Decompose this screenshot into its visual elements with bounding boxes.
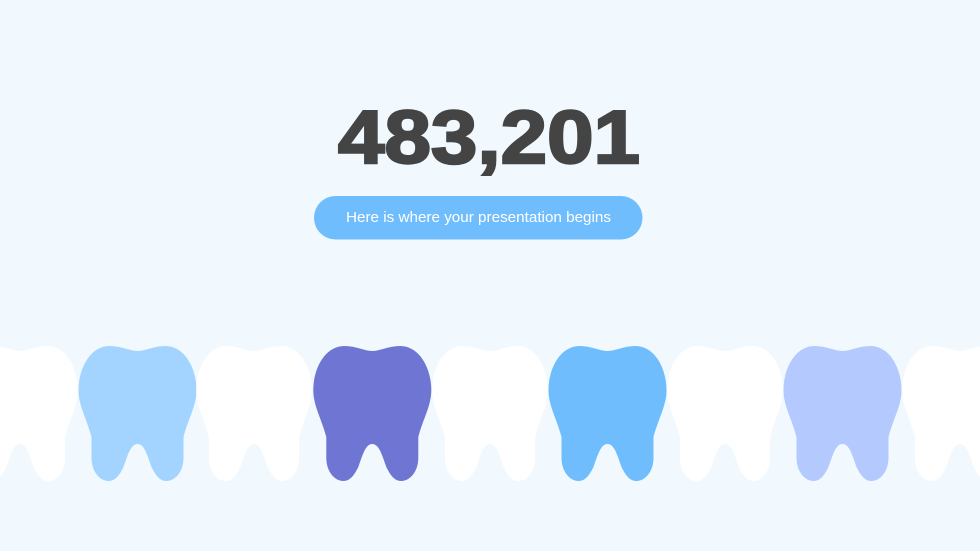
icon: white tooth 3 — [432, 346, 548, 481]
icon: white tooth 1 — [0, 346, 78, 481]
subtitle pill — [314, 196, 642, 240]
icon: white tooth 4 — [667, 346, 783, 481]
icon: light blue tooth — [78, 346, 196, 481]
subtitle pill: Here is where your presentation begins — [346, 210, 611, 226]
icon: sky blue tooth — [548, 346, 666, 481]
icon: periwinkle tooth — [784, 346, 902, 481]
icon: white tooth 5 — [902, 346, 980, 481]
row of teeth — [0, 346, 980, 481]
icon: purple tooth — [313, 346, 431, 481]
icon: white tooth 2 — [196, 346, 312, 481]
big number title: 483,201 — [338, 95, 640, 179]
